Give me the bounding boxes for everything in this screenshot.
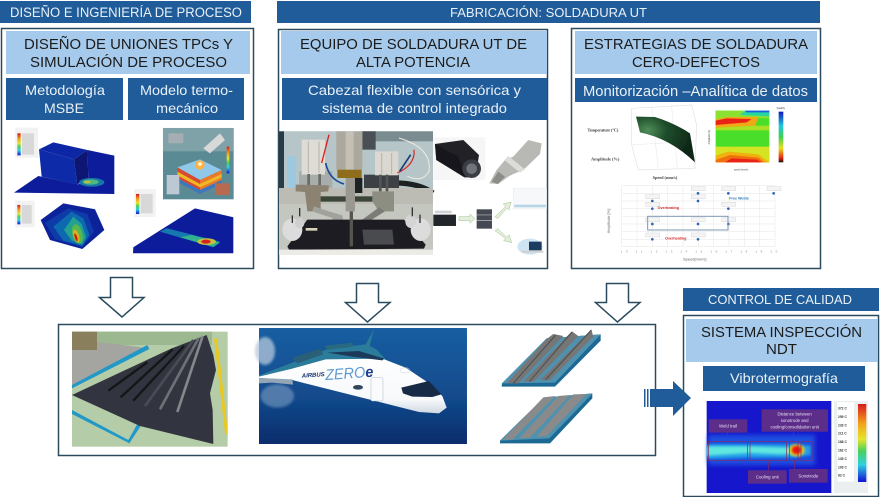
image: flat panel with strips [500, 393, 592, 443]
legend: temperature scale: 259 C [838, 415, 847, 419]
section header: diseño e ingeniería de proceso: DISEÑO E INGENIERÍA DE PROCESO [10, 5, 242, 20]
chart: 3D response surface [587, 105, 697, 180]
arrow: design to product [100, 278, 144, 317]
logo text: Airbus ZEROe [300, 364, 374, 386]
image: welding head photo [279, 131, 433, 255]
image: thermo-mechanical model illustration [163, 128, 234, 199]
panel: diseño de uniones y simulación [2, 28, 254, 268]
legend: temperature scale: 135 C [838, 457, 847, 461]
chart: process window scatter plot: Free Welds [729, 197, 749, 201]
image: sonotrode [489, 140, 542, 184]
image: stiffened panel with ribs [502, 329, 601, 387]
logo text: Airbus ZEROe: ZEROe [324, 364, 374, 384]
chart: contour heat map: speed (mm/s) [734, 169, 748, 171]
logo text: Airbus ZEROe: AIRBUS [301, 372, 325, 380]
subheading: vibrotermografía: Vibrotermografía [730, 370, 838, 386]
panel: products and applications [58, 324, 656, 456]
image: thermography map: Weld trail [719, 424, 737, 429]
image: FEM T-joint model [14, 128, 114, 194]
subheading: vibrotermografía [703, 366, 865, 391]
heading: equipo de soldadura [281, 31, 547, 74]
heading: estrategias de soldadura: ESTRATEGIAS DE SOLDADURA [584, 37, 808, 53]
subheading: modelo termo-mecánico [128, 78, 244, 120]
chart: contour heat map: Amplitude (%) [708, 129, 711, 144]
subheading: modelo termo-mecánico: mecánico [156, 100, 218, 116]
heading: sistema inspección [686, 319, 878, 362]
chart: process window scatter plot [606, 186, 781, 262]
image: thermography map: cooling/consolidation unit [770, 425, 820, 430]
subheading: cabezal flexible [282, 78, 547, 120]
heading: estrategias de soldadura: CERO-DEFECTOS [632, 55, 760, 71]
heading: diseño de uniones [6, 31, 250, 74]
heading: diseño de uniones: SIMULACIÓN DE PROCESO [30, 54, 227, 71]
image: thermography map: sonotrode and [781, 418, 809, 423]
diagram: data flow system [433, 188, 547, 255]
chart: process window scatter plot: Overheating [658, 206, 679, 210]
subheading: metodología MSBE: Metodología [25, 82, 105, 98]
subheading: modelo termo-mecánico: Modelo termo- [140, 82, 233, 98]
heading: equipo de soldadura: ALTA POTENCIA [356, 55, 470, 71]
section header: control de calidad: CONTROL DE CALIDAD [708, 292, 852, 307]
arrow: product to quality control [644, 381, 691, 416]
legend: temperature scale: 103 C [838, 465, 847, 469]
heading: sistema inspección: SISTEMA INSPECCIÓN [701, 324, 862, 341]
arrow: strategies to product [596, 284, 640, 322]
heading: diseño de uniones: DISEÑO DE UNIONES TPCs Y [24, 36, 233, 53]
legend: temperature scale: 211 C [838, 432, 847, 436]
legend: temperature scale: 162 C [838, 448, 847, 452]
image: thermography map [707, 401, 831, 493]
chart: contour heat map [708, 106, 786, 171]
chart: 3D response surface: Amplitude (%) [591, 157, 620, 162]
legend: temperature scale [834, 401, 868, 493]
subheading: cabezal flexible: sistema de control integrado [322, 100, 507, 116]
chart: process window scatter plot: Amplitude [%] [606, 209, 611, 233]
chart: 3D response surface: Speed (mm/s) [653, 175, 678, 180]
chart: contour heat map: Quality [777, 106, 786, 110]
panel: sistema inspección NDT [684, 316, 878, 496]
image: FEM weld detail model [15, 201, 104, 249]
image: FEM plate model [133, 189, 233, 253]
heading: sistema inspección: NDT [766, 342, 797, 358]
heading: equipo de soldadura: EQUIPO DE SOLDADURA UT DE [300, 37, 527, 53]
arrow: equipment to product [346, 284, 390, 322]
section header: fabricación soldadura UT: FABRICACIÓN: SOLDADURA UT [450, 5, 647, 20]
legend: temperature scale: 372 C [838, 406, 847, 410]
panel: equipo de soldadura UT [278, 30, 548, 268]
image: thermography map: Cooling unit [756, 475, 780, 480]
chart: process window scatter plot: 10 11 12 13 14 15 16 17 18 19 20 [621, 250, 778, 254]
section header: diseño e ingeniería de proceso [0, 1, 251, 23]
subheading: monitorización [575, 78, 817, 102]
subheading: monitorización: Monitorización –Analítica de datos [583, 84, 808, 100]
panel: estrategias de soldadura cero-defectos [572, 28, 820, 268]
legend: temperature scale: 188 C [838, 440, 847, 444]
subheading: metodología MSBE: MSBE [44, 100, 84, 116]
chart: process window scatter plot: Speed[mm/s] [683, 257, 706, 262]
image: thermography map: Sonotrode [798, 474, 819, 479]
legend: temperature scale: 82 C [838, 474, 846, 478]
image: Airbus ZEROe aircraft [255, 328, 467, 444]
image: composite stiffened panel photo [72, 332, 228, 447]
section header: fabricación soldadura UT [277, 1, 820, 23]
chart: 3D response surface: Temperature (°C) [587, 128, 619, 133]
heading: estrategias de soldadura [575, 31, 817, 74]
section header: control de calidad [683, 288, 879, 311]
image: thermal camera [433, 137, 485, 180]
subheading: cabezal flexible: Cabezal flexible con sensórica y [308, 82, 521, 98]
chart: process window scatter plot: Overheating [665, 236, 686, 240]
legend: temperature scale: 233 C [838, 423, 847, 427]
image: thermography map: Distance between [777, 412, 812, 417]
subheading: metodología MSBE [6, 78, 123, 120]
